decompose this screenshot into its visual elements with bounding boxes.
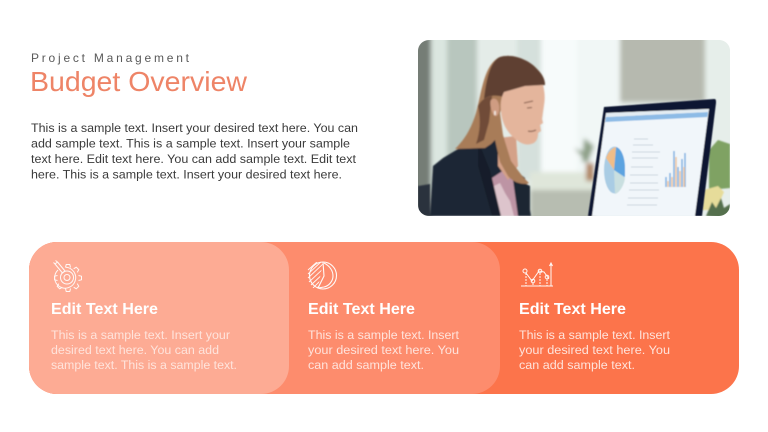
chart on screen: bars	[666, 151, 685, 187]
chart on screen: pie	[604, 146, 625, 194]
text block 2: can add sample text.	[308, 358, 424, 372]
intro text block: here. This is a sample text. Insert your desired text here.	[31, 168, 342, 182]
text block 1	[51, 328, 237, 372]
text block 1: sample text. This is a sample text.	[51, 358, 237, 372]
panel 2: budget allocation	[29, 242, 500, 394]
heading 2: Edit Text Here	[308, 301, 415, 318]
text block 1: desired text here. You can add	[51, 343, 219, 357]
text block 2: your desired text here. You	[308, 343, 459, 357]
text block 3: your desired text here. You	[519, 343, 670, 357]
intro text block	[31, 121, 358, 182]
title: Budget Overview: Budget Overview	[30, 66, 248, 97]
eyebrow: Project Management: Project Management	[31, 51, 190, 65]
panel 3: budget trends	[29, 242, 739, 394]
text block 3: This is a sample text. Insert	[519, 328, 671, 342]
icon: gear with wrench	[54, 260, 82, 292]
intro text block: text here. Edit text here. You can add sample text. Edit text	[31, 152, 357, 166]
plant	[702, 140, 730, 218]
intro text block: This is a sample text. Insert your desired text here. You can	[31, 121, 358, 135]
heading 1: Edit Text Here	[51, 301, 158, 318]
icon: line chart	[521, 263, 553, 286]
monitor	[588, 99, 716, 216]
text block 2: This is a sample text. Insert	[308, 328, 460, 342]
text block 3	[519, 328, 671, 372]
text block 1: This is a sample text. Insert your	[51, 328, 230, 342]
text block 2	[308, 328, 460, 372]
text block 3: can add sample text.	[519, 358, 635, 372]
intro text block: add sample text. This is a sample text. Insert your sample	[31, 136, 350, 150]
woman	[418, 56, 545, 216]
icon: pie chart	[308, 261, 336, 290]
photo: woman reviewing budget charts on a monitor	[418, 40, 730, 216]
panel 1: planning settings	[29, 242, 289, 394]
heading 3: Edit Text Here	[519, 301, 626, 318]
